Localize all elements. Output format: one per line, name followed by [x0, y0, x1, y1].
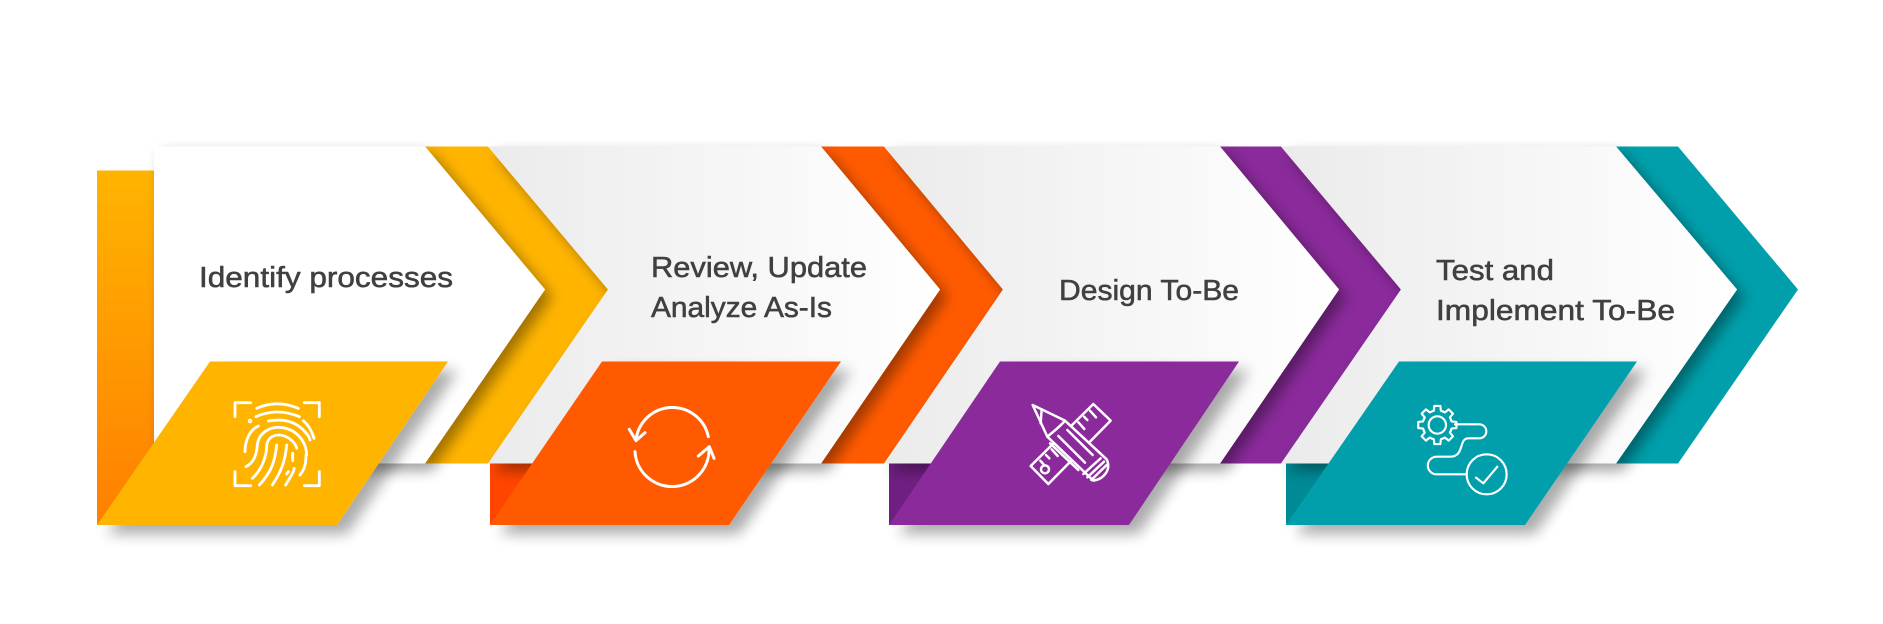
icon tile purple — [889, 362, 1239, 525]
step 4: test and implement to-be — [1281, 146, 1798, 525]
left vertical bar — [97, 170, 154, 525]
heading: Test and Implement To-Be: Implement To-Be — [1436, 295, 1675, 327]
icon tile teal — [1286, 362, 1637, 525]
step 3: design to-be — [884, 146, 1401, 525]
icon: gear, path and check — [1418, 406, 1507, 494]
chevron band orange — [821, 146, 1003, 464]
white arrow panel — [154, 146, 545, 464]
chevron band purple — [1220, 146, 1401, 464]
heading: Design To-Be: Design To-Be — [1059, 275, 1239, 307]
icon tile yellow — [97, 362, 448, 525]
lower bar orange — [490, 460, 610, 525]
grey arrow panel — [1281, 146, 1737, 464]
chevron band yellow — [425, 146, 608, 464]
icon: fingerprint — [235, 403, 319, 486]
lower bar teal — [1286, 460, 1406, 525]
heading: Review, Update Analyze As-Is: Review, Update — [651, 252, 867, 284]
chevron band teal — [1616, 146, 1798, 464]
heading: Test and Implement To-Be: Test and — [1436, 255, 1554, 287]
heading: Review, Update Analyze As-Is: Analyze As-Is — [651, 292, 832, 324]
lower bar purple — [889, 460, 1009, 525]
grey arrow panel — [884, 146, 1339, 464]
grey arrow panel — [488, 146, 940, 464]
step 1: identify processes — [97, 146, 608, 525]
icon: pencil and ruler — [1031, 404, 1111, 484]
step 2: review, update, analyze — [488, 146, 1003, 525]
heading: Identify processes: Identify processes — [199, 262, 453, 294]
icon: refresh arrows — [629, 407, 714, 487]
icon tile orange — [490, 362, 841, 525]
